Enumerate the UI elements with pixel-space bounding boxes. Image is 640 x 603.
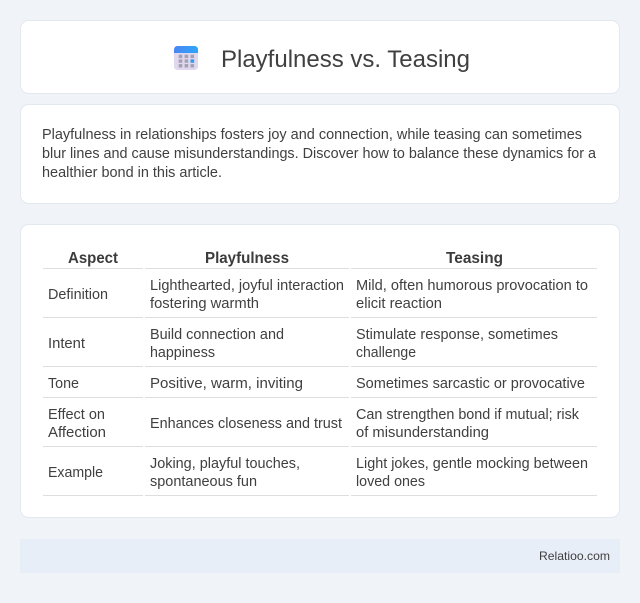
table row: example: spontaneous fun bbox=[150, 474, 257, 490]
footer bbox=[20, 539, 620, 573]
table header row bbox=[68, 250, 503, 267]
table row: intent: Build connection and bbox=[150, 327, 284, 343]
table row: intent: Stimulate response, sometimes bbox=[356, 327, 558, 343]
table row: example: loved ones bbox=[356, 474, 425, 490]
table row: tone: Positive, warm, inviting bbox=[150, 376, 303, 392]
table row: effect on affection: of misunderstanding bbox=[356, 425, 489, 441]
table header row: Aspect bbox=[68, 250, 118, 267]
table row: intent: happiness bbox=[150, 345, 215, 361]
text block: introduction: healthier bond in this article. bbox=[42, 165, 222, 181]
icon: calendar bbox=[174, 46, 198, 70]
table row: definition: Definition bbox=[48, 287, 108, 303]
panel: comparison table bbox=[20, 224, 620, 518]
table row: example bbox=[48, 456, 588, 490]
table row: effect on affection: Affection bbox=[48, 425, 106, 441]
table row: effect on affection: Effect on bbox=[48, 407, 105, 423]
table header row: Teasing bbox=[446, 250, 503, 267]
text block: introduction: blur lines and cause misunderstandings. Discover how to balance these dynamics for a bbox=[42, 146, 596, 162]
panel: introduction bbox=[20, 104, 620, 204]
table row: definition: elicit reaction bbox=[356, 296, 442, 312]
table row: effect on affection: Enhances closeness and trust bbox=[150, 416, 342, 432]
table row: intent: Intent bbox=[48, 336, 85, 352]
table row: definition: fostering warmth bbox=[150, 296, 259, 312]
table row: definition bbox=[48, 278, 588, 312]
text block: introduction bbox=[42, 127, 596, 181]
text block: introduction: Playfulness in relationships fosters joy and connection, while teasing can sometimes bbox=[42, 127, 582, 143]
table row: example: Example bbox=[48, 465, 103, 481]
table row: tone: Tone bbox=[48, 376, 79, 392]
table row: tone bbox=[48, 376, 585, 392]
table row: effect on affection bbox=[48, 407, 580, 441]
panel: title header bbox=[20, 20, 620, 94]
table row: tone: Sometimes sarcastic or provocative bbox=[356, 376, 585, 392]
table row: effect on affection: Can strengthen bond if mutual; risk bbox=[356, 407, 580, 423]
title: Playfulness vs. Teasing bbox=[221, 46, 470, 73]
table row: example: Light jokes, gentle mocking between bbox=[356, 456, 588, 472]
footer credit: Relatioo.com bbox=[539, 549, 610, 563]
table row: definition: Lighthearted, joyful interaction bbox=[150, 278, 344, 294]
table row: intent bbox=[48, 327, 558, 361]
table row: intent: challenge bbox=[356, 345, 416, 361]
table row: example: Joking, playful touches, bbox=[150, 456, 300, 472]
table header row: Playfulness bbox=[205, 250, 289, 267]
table row: definition: Mild, often humorous provocation to bbox=[356, 278, 588, 294]
